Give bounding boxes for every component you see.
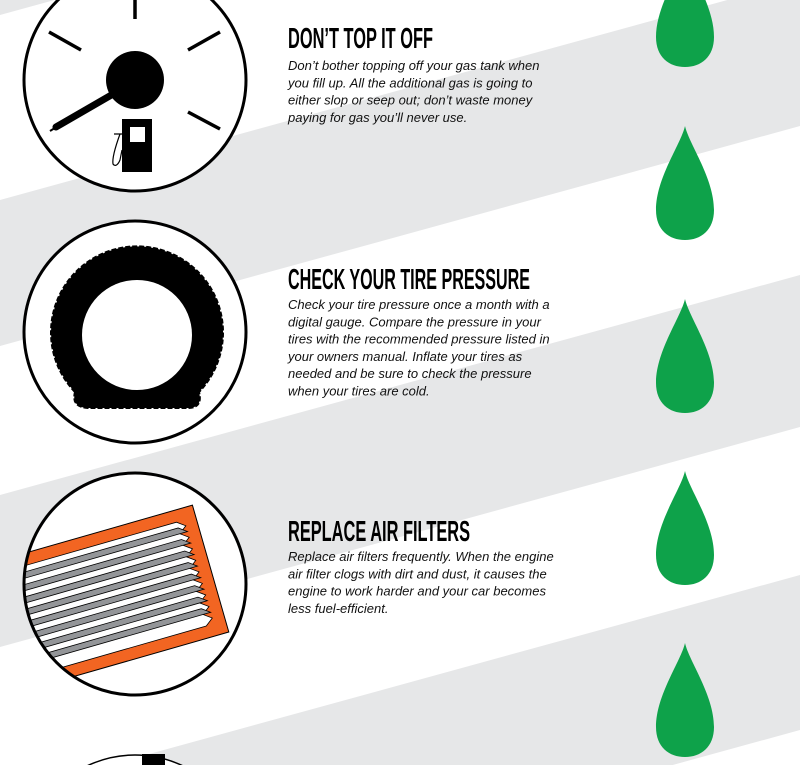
text block: filters: engine to work harder and your car becomes [288, 584, 546, 599]
heading: don't top it off: DON’T TOP IT OFF [288, 23, 433, 55]
text block: tire: your owners manual. Inflate your tires as [287, 349, 523, 364]
text block: filters: air filter clogs with dirt and dust, it causes the [288, 566, 547, 581]
heading: air filters: REPLACE AIR FILTERS [288, 516, 470, 548]
icon: fuel gauge [24, 0, 246, 191]
icon: air filter [0, 473, 246, 695]
text block: tire: tires with the recommended pressure listed in [288, 332, 550, 347]
icons: green drops [656, 0, 714, 757]
text block: tire: digital gauge. Compare the pressure in your [288, 314, 542, 329]
heading: tire pressure: CHECK YOUR TIRE PRESSURE [288, 264, 530, 296]
text block: top off: you fill up. All the additional gas is going to [287, 75, 533, 90]
text block: filters: Replace air filters frequently. When the engine [288, 549, 554, 564]
icon: bottom circle [24, 754, 246, 765]
text block: tire: Check your tire pressure once a month with a [288, 297, 550, 312]
text block: tire: when your tires are cold. [288, 384, 430, 398]
text block: tire: needed and be sure to check the pressure [288, 366, 532, 381]
text block: filters: less fuel-efficient. [288, 601, 388, 616]
text block: top off: Don’t bother topping off your gas tank when [288, 58, 540, 73]
text block: top off: either slop or seep out; don’t waste money [288, 93, 534, 108]
text block: top off: paying for gas you’ll never use. [287, 110, 467, 125]
icon: tire [24, 221, 246, 443]
